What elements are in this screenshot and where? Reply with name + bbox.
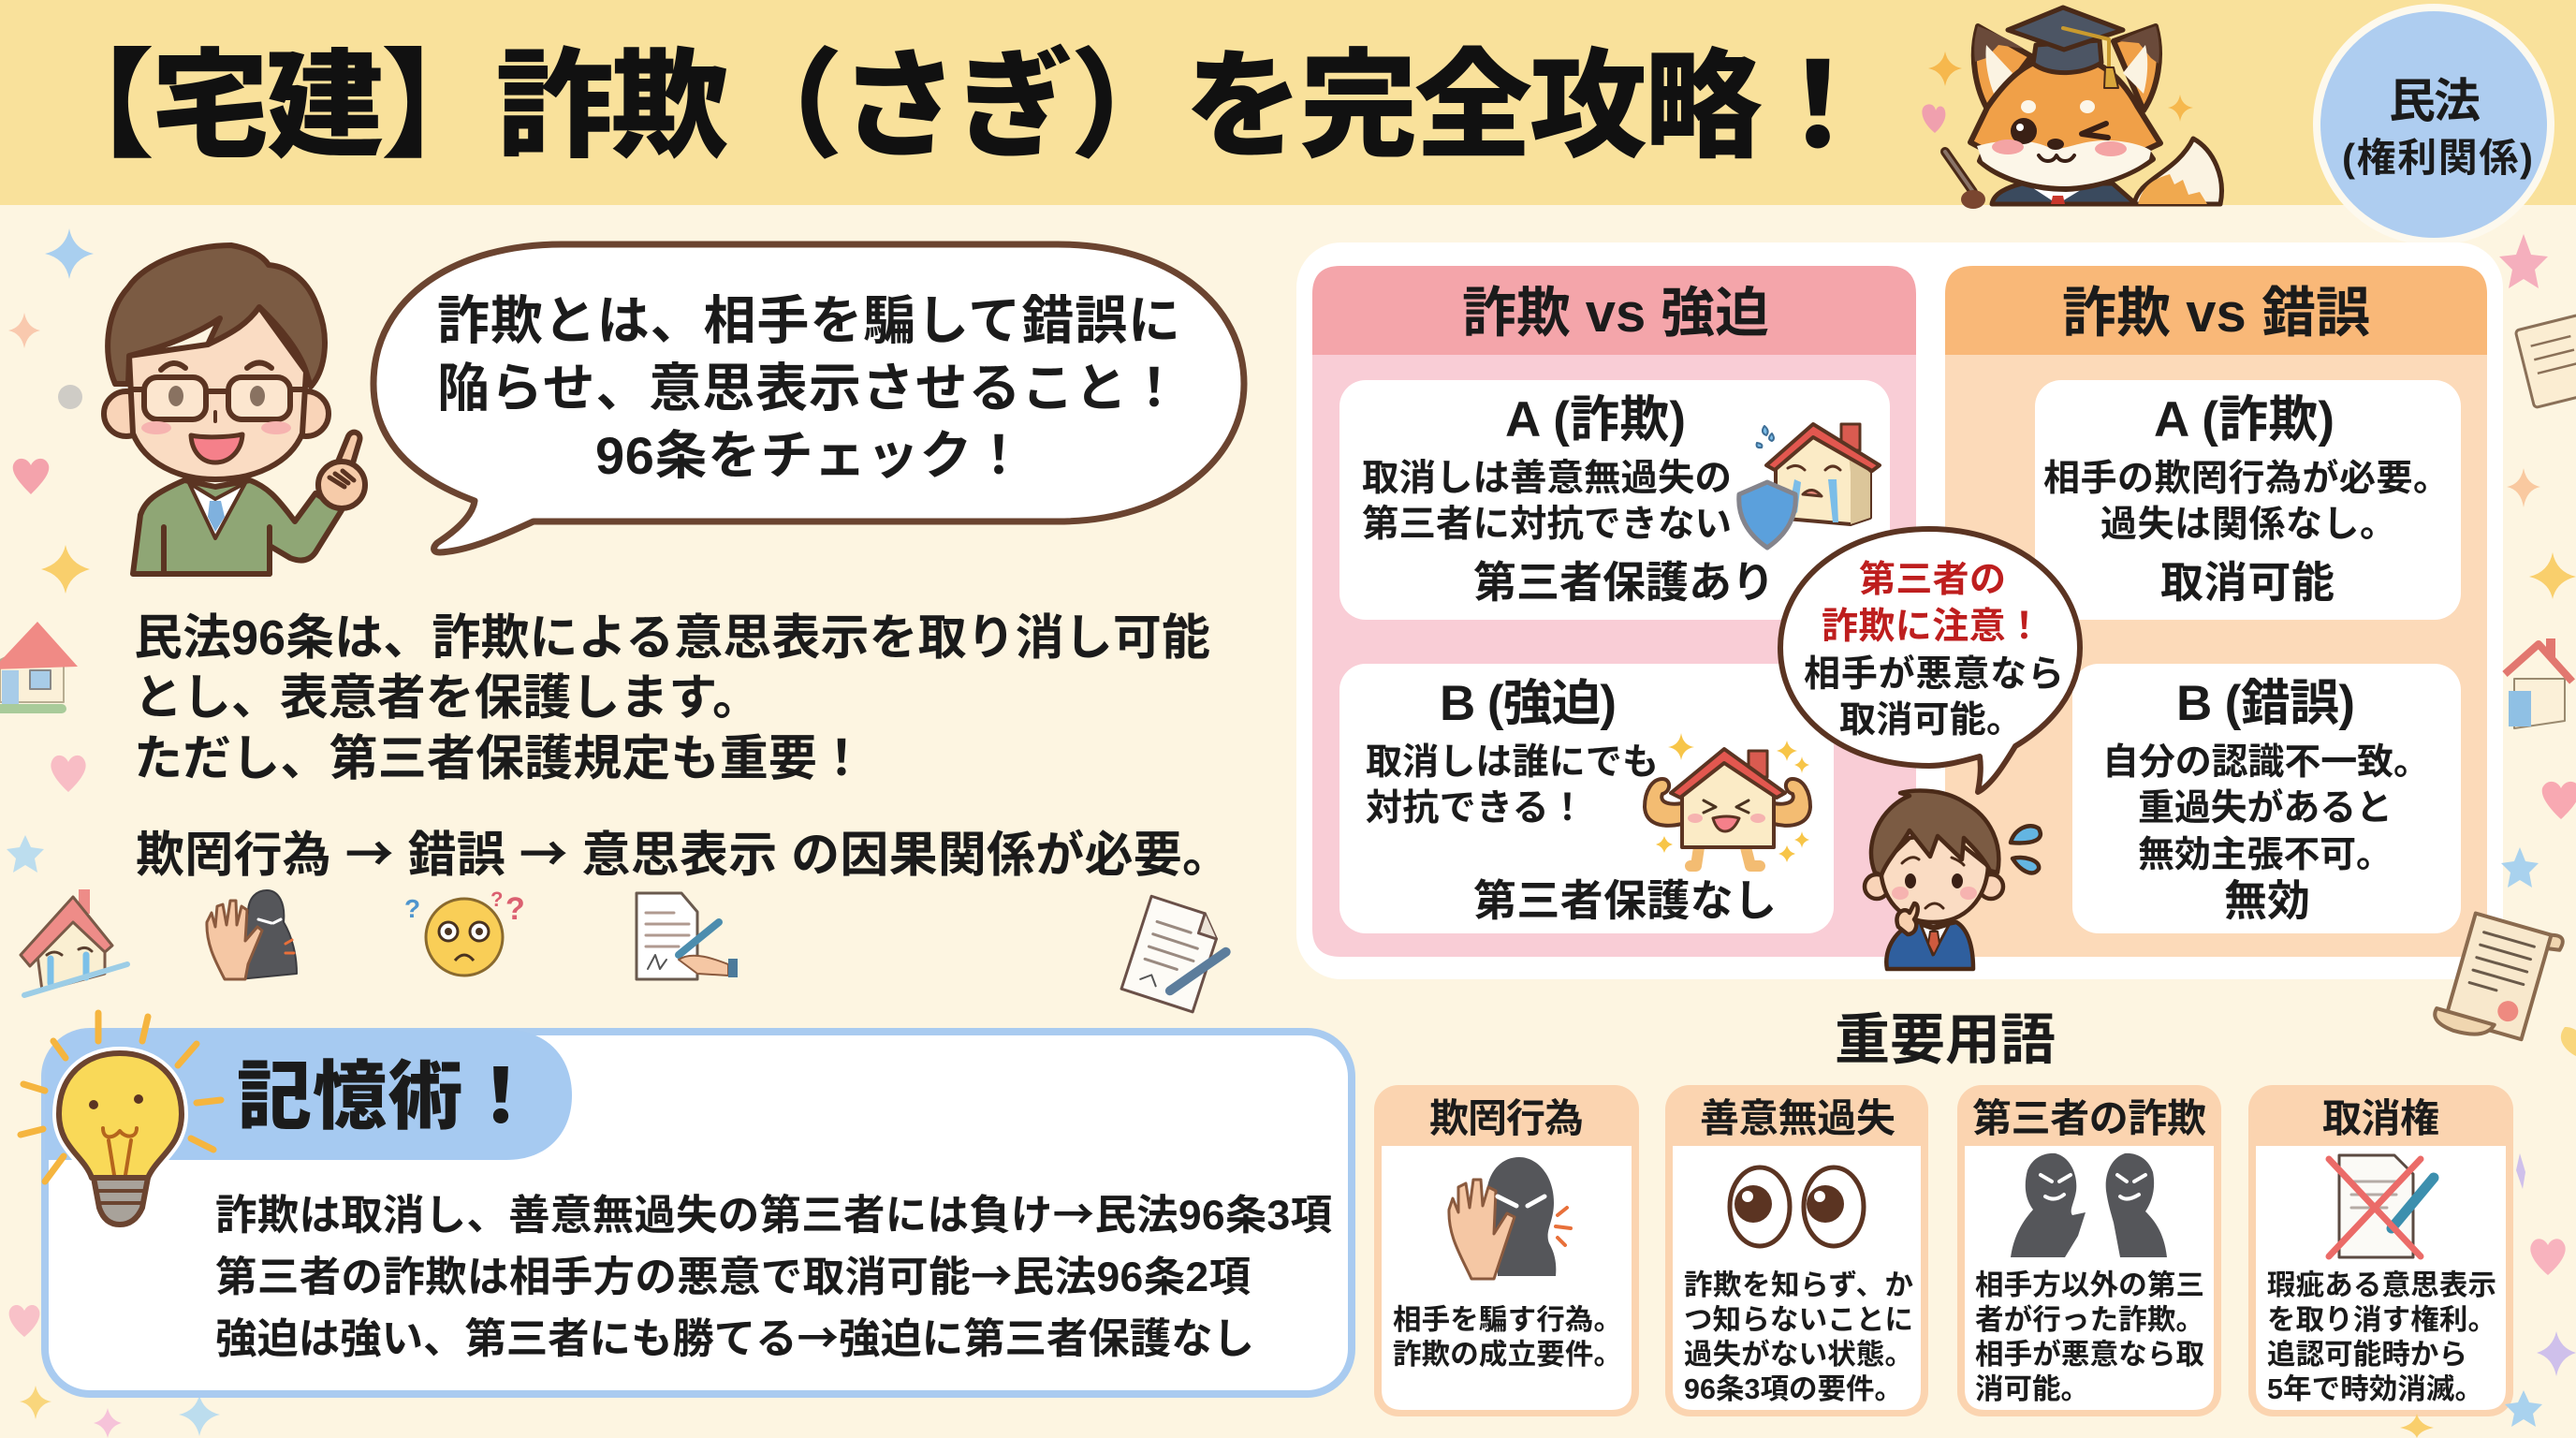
- panel: term 欺罔行為: 詐欺の成立要件。: [1393, 1339, 1622, 1371]
- card: A fraud: A (詐欺): [1505, 392, 1686, 448]
- card: B duress: B (強迫): [1440, 676, 1617, 731]
- card: B duress: [1339, 664, 1834, 933]
- text block: article 96 explanation: とし、表意者を保護します。: [134, 671, 761, 726]
- card: B mistake: 無効: [2224, 876, 2310, 925]
- panel: term 第三者の詐欺: 者が行った詐欺。: [1975, 1303, 2204, 1336]
- speech bubble: teacher: 96条をチェック！: [595, 426, 1025, 485]
- text block: article 96 explanation: 民法96条は、詐欺による意思表示を取り消し可能: [134, 611, 1210, 666]
- panel: term 取消権: を取り消す権利。: [2267, 1304, 2496, 1336]
- icon: crying house left: [21, 889, 127, 995]
- panel: term 善意無過失: 善意無過失: [1700, 1096, 1895, 1140]
- panel: fraud vs mistake: [1945, 266, 2487, 957]
- card: B mistake: 重過失があると: [2138, 788, 2393, 829]
- sparkles and heart around fox: [1922, 51, 2193, 133]
- icon: confused face: [404, 888, 525, 976]
- panel: term 善意無過失: 96条3項の要件。: [1684, 1373, 1903, 1405]
- icon: masked person: [207, 890, 297, 979]
- panel: term 取消権: 瑕疵ある意思表示: [2267, 1269, 2496, 1301]
- panel: memory technique: 強迫は強い、第三者にも勝てる→強迫に第三者保護なし: [215, 1304, 1254, 1365]
- panel: term 第三者の詐欺: 第三者の詐欺: [1972, 1096, 2206, 1140]
- panel: memory technique: 第三者の詐欺は相手方の悪意で取消可能→民法96条2項: [215, 1242, 1251, 1303]
- speech bubble: teacher: 陥らせ、意思表示させること！: [437, 359, 1180, 418]
- panel: term 善意無過失: つ知らないことに: [1684, 1304, 1913, 1336]
- panel: memory technique: 記憶術！: [237, 1055, 538, 1138]
- panel: memory technique: [21, 1013, 1352, 1394]
- panel: fraud vs mistake: 詐欺 vs 錯誤: [2062, 283, 2370, 344]
- icon: confused face: ?: [490, 888, 503, 911]
- card: A fraud: 相手の欺罔行為が必要。: [2043, 459, 2450, 499]
- title: 【宅建】詐欺（さぎ）を完全攻略！: [37, 40, 1877, 172]
- card: B mistake: 自分の認識不一致。: [2102, 742, 2430, 783]
- icon: two shadowy figures: [2011, 1153, 2167, 1257]
- icon: masked person and hand: [1449, 1157, 1571, 1279]
- card: A fraud: [1339, 380, 1890, 620]
- icon: scroll lower right: [2432, 909, 2564, 1053]
- card: A fraud: 第三者に対抗できない: [1362, 504, 1732, 545]
- panel: term 善意無過失: 詐欺を知らず、か: [1684, 1269, 1913, 1301]
- icon: light bulb: [21, 1013, 221, 1225]
- panel: term 善意無過失: 過失がない状態。: [1684, 1338, 1913, 1371]
- panel: fraud vs duress: 詐欺 vs 強迫: [1462, 283, 1769, 344]
- card: A fraud: A (詐欺): [2154, 392, 2334, 448]
- icon: teacher character: [104, 245, 365, 574]
- icon: small house right: [2505, 638, 2572, 728]
- card: B duress: 第三者保護なし: [1473, 876, 1777, 925]
- panel: term 第三者の詐欺: 相手方以外の第三: [1975, 1269, 2204, 1301]
- panel: comparison container: [1296, 242, 2503, 979]
- text block: article 96 explanation: ただし、第三者保護規定も重要！: [134, 732, 866, 786]
- badge: 民法(権利関係): (権利関係): [2342, 136, 2533, 180]
- icon: crying house with shield: [1739, 424, 1880, 548]
- card: A fraud: 過失は関係なし。: [2100, 505, 2396, 545]
- panel: term 欺罔行為: [1374, 1085, 1639, 1416]
- speech bubble: teacher: [373, 244, 1244, 552]
- panel: memory technique: 詐欺は取消し、善意無過失の第三者には負け→民法96条3項: [215, 1181, 1332, 1241]
- card: B mistake: 無効主張不可。: [2138, 835, 2393, 875]
- callout: third-party fraud: 第三者の: [1859, 560, 2006, 600]
- panel: term 取消権: 5年で時効消滅。: [2267, 1373, 2483, 1405]
- icon: worried boy: [1865, 791, 2041, 969]
- callout: third-party fraud: 取消可能。: [1839, 700, 2023, 741]
- icon: muscle house: [1645, 733, 1810, 866]
- panel: term 取消権: 取消権: [2322, 1096, 2439, 1140]
- panel: term 欺罔行為: 相手を騙す行為。: [1393, 1304, 1622, 1336]
- header band: [0, 0, 2576, 205]
- callout: third-party fraud: 詐欺に注意！: [1822, 607, 2042, 647]
- speech bubble: teacher: 詐欺とは、相手を騙して錯誤に: [437, 291, 1180, 350]
- icon: confused face: ?: [505, 891, 525, 927]
- icon: contract and pen: [1121, 896, 1236, 1016]
- card: A fraud: [2035, 380, 2461, 620]
- background decorations right: [2400, 234, 2576, 1438]
- panel: term 善意無過失: [1665, 1085, 1928, 1416]
- panel: term 取消権: [2248, 1085, 2513, 1416]
- icon: signing document: [637, 893, 738, 979]
- card: B mistake: B (錯誤): [2176, 676, 2355, 731]
- panel: term 第三者の詐欺: 消可能。: [1975, 1373, 2089, 1405]
- icon: scroll upper right: [2515, 315, 2576, 408]
- icon: small house left: [0, 622, 78, 713]
- card: B duress: 対抗できる！: [1366, 788, 1586, 829]
- panel: term 第三者の詐欺: [1957, 1085, 2221, 1416]
- callout: third-party fraud: 相手が悪意なら: [1804, 654, 2064, 695]
- text block: article 96 explanation: [134, 611, 1210, 786]
- card: B duress: 取消しは誰にでも: [1366, 742, 1659, 783]
- card: A fraud: 取消可能: [2160, 558, 2334, 607]
- icon: fox mascot: [1945, 7, 2221, 209]
- background decorations left: [7, 228, 220, 1438]
- icon: crossed-out document: [2329, 1155, 2434, 1257]
- badge: 民法(権利関係): 民法: [2389, 75, 2481, 127]
- panel: term 欺罔行為: 欺罔行為: [1429, 1096, 1584, 1140]
- badge: 民法(権利関係): [2317, 7, 2551, 242]
- heading: key terms: 重要用語: [1835, 1009, 2056, 1071]
- card: A fraud: 取消しは善意無過失の: [1362, 458, 1732, 499]
- icon: confused face: ?: [404, 894, 420, 923]
- panel: term 第三者の詐欺: 相手が悪意なら取: [1975, 1338, 2205, 1371]
- text: causal chain: 欺罔行為 → 錯誤 → 意思表示 の因果関係が必要。: [136, 815, 1231, 886]
- icon: eyes: [1730, 1167, 1864, 1246]
- header pill: [45, 1030, 572, 1160]
- card: A fraud: 第三者保護あり: [1473, 558, 1775, 607]
- card: B mistake: [2072, 664, 2461, 933]
- panel: fraud vs duress: [1312, 266, 1916, 957]
- callout: third-party fraud: [1780, 529, 2080, 792]
- panel: term 取消権: 追認可能時から: [2267, 1339, 2467, 1371]
